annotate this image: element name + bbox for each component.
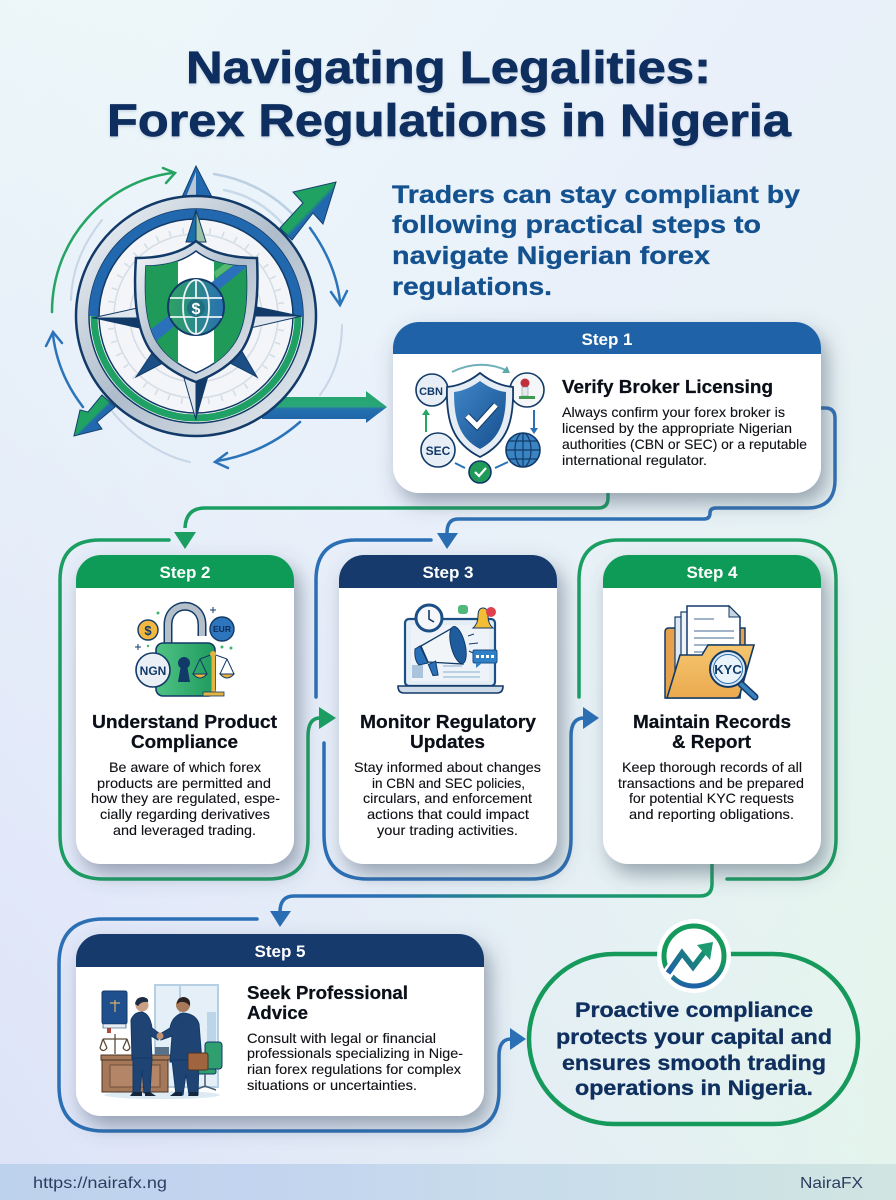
step 2 body: Be aware of which forex bbox=[109, 759, 261, 775]
step 4 title: Maintain Records bbox=[633, 711, 791, 732]
person right bbox=[156, 997, 208, 1096]
step 2 body: and leveraged trading. bbox=[113, 822, 256, 838]
step 1 title: Verify Broker Licensing bbox=[562, 376, 773, 397]
subtitle text block: following practical steps to bbox=[392, 211, 761, 239]
person left bbox=[130, 997, 160, 1096]
green chair bbox=[194, 1042, 222, 1090]
step 3 title: Updates bbox=[410, 731, 485, 752]
step 2 title bbox=[92, 711, 277, 752]
compass points bbox=[186, 210, 196, 242]
footer bbox=[0, 1164, 896, 1200]
outline: step 4 bbox=[579, 540, 836, 879]
icon: verified shield with regulators bbox=[416, 365, 544, 483]
panel: step 1 bbox=[393, 322, 821, 493]
footer brand: NairaFX bbox=[800, 1175, 863, 1192]
outline: step 5 to closing message bbox=[59, 919, 526, 1131]
globe with currency bbox=[168, 279, 224, 335]
icon: verified shield with regulators: CBN bbox=[419, 386, 443, 398]
compass ring bbox=[76, 196, 316, 436]
step 5 header: Step 5 bbox=[254, 942, 306, 961]
orbit arrows bbox=[46, 168, 347, 468]
title bbox=[107, 42, 792, 146]
icon: padlock with currencies and scales bbox=[135, 606, 234, 696]
step 4 body: for potential KYC requests bbox=[629, 790, 794, 806]
panel: step 2 bbox=[76, 555, 294, 864]
step 2 title: Compliance bbox=[131, 731, 238, 752]
connector: step 1 to step 3 bbox=[437, 408, 835, 549]
step 2 header: Step 2 bbox=[159, 563, 211, 582]
arrow SW bbox=[74, 395, 115, 436]
icon: folder with KYC magnifier bbox=[665, 606, 755, 698]
desk bbox=[101, 1047, 173, 1092]
step 1 body bbox=[562, 404, 807, 468]
icon: professionals shaking hands bbox=[100, 985, 222, 1099]
scales bbox=[100, 1034, 130, 1054]
step 5 body: Consult with legal or financial bbox=[247, 1030, 436, 1046]
icon: growth arrow badge bbox=[657, 919, 731, 993]
step 4 title bbox=[633, 711, 791, 752]
step 3 body: your trading activities. bbox=[377, 822, 518, 838]
step 3 body bbox=[354, 759, 541, 838]
step 3 header bbox=[339, 555, 557, 588]
step 3 header: Step 3 bbox=[422, 563, 474, 582]
step 3 body: actions that could impact bbox=[367, 806, 529, 822]
step 3 body: circulars, and enforcement bbox=[363, 790, 532, 806]
step 5 body: situations or uncertainties. bbox=[247, 1077, 417, 1093]
subtitle text block: regulations. bbox=[392, 273, 552, 301]
step 1 body: authorities (CBN or SEC) or a reputable bbox=[562, 436, 807, 452]
footer link: https://nairafx.ng bbox=[33, 1175, 167, 1192]
step 3 body: Stay informed about changes bbox=[354, 759, 541, 775]
step 5 title bbox=[247, 982, 408, 1023]
step 2 title: Understand Product bbox=[92, 711, 277, 732]
icon: verified shield with regulators: SEC bbox=[426, 444, 451, 458]
title: Forex Regulations in Nigeria bbox=[107, 95, 792, 146]
icon: padlock with currencies and scales: EUR bbox=[213, 624, 231, 634]
arrow NE bbox=[280, 182, 336, 240]
outline: step 2 bbox=[60, 540, 336, 879]
step 2 body: cially regarding derivatives bbox=[100, 806, 270, 822]
step 5 title: Seek Professional bbox=[247, 982, 408, 1003]
arrow E bbox=[262, 391, 387, 423]
step 4 body: and reporting obligations. bbox=[629, 806, 794, 822]
briefcase bbox=[188, 1053, 208, 1070]
step 2 body bbox=[91, 759, 280, 838]
step 4 header: Step 4 bbox=[686, 563, 738, 582]
connector: step 4 to step 5 bbox=[270, 864, 712, 927]
step 5 body: rian forex regulations for complex bbox=[247, 1061, 461, 1077]
step 5 header bbox=[76, 934, 484, 967]
icon: compass shield emblem bbox=[46, 166, 387, 468]
icon: padlock with currencies and scales: NGN bbox=[140, 664, 166, 678]
subtitle text block bbox=[392, 181, 800, 301]
closing message text: ensures smooth trading bbox=[562, 1051, 826, 1075]
step 4 header bbox=[603, 555, 821, 588]
step 4 body bbox=[618, 759, 804, 822]
step 4 body: Keep thorough records of all bbox=[622, 759, 802, 775]
panel: step 4 bbox=[603, 555, 821, 864]
shield bbox=[135, 241, 257, 382]
step 1 body: Always confirm your forex broker is bbox=[562, 404, 785, 420]
step 1 header: Step 1 bbox=[581, 330, 633, 349]
step 1 body: international regulator. bbox=[562, 452, 707, 468]
step 4 body: transactions and be prepared bbox=[618, 775, 804, 791]
closing message text: operations in Nigeria. bbox=[575, 1076, 813, 1100]
panel: step 3 bbox=[339, 555, 557, 864]
step 3 title: Monitor Regulatory bbox=[360, 711, 537, 732]
connector: step 1 to step 2 bbox=[174, 493, 608, 549]
step 1 body: licensed by the appropriate Nigerian bbox=[562, 420, 792, 436]
window bbox=[155, 985, 218, 1087]
panel: closing message bbox=[529, 919, 858, 1124]
step 1 header bbox=[393, 322, 821, 354]
step 3 body: in CBN and SEC policies, bbox=[372, 775, 525, 791]
icon: padlock with currencies and scales: $ bbox=[144, 623, 152, 638]
step 5 title: Advice bbox=[247, 1002, 308, 1023]
subtitle text block: navigate Nigerian forex bbox=[392, 242, 710, 270]
closing message text: protects your capital and bbox=[556, 1025, 832, 1049]
closing message text bbox=[556, 998, 832, 1100]
icon: laptop with megaphone and alerts bbox=[398, 605, 503, 693]
icon: compass shield emblem: $ bbox=[192, 301, 201, 318]
icon: folder with KYC magnifier: KYC bbox=[714, 662, 742, 677]
panel: step 5 bbox=[76, 934, 484, 1116]
step 4 title: & Report bbox=[672, 731, 751, 752]
closing message text: Proactive compliance bbox=[575, 998, 813, 1022]
step 5 body bbox=[247, 1030, 463, 1093]
outline: step 3 bbox=[316, 540, 599, 879]
step 5 body: professionals specializing in Nige- bbox=[247, 1045, 463, 1061]
step 2 header bbox=[76, 555, 294, 588]
step 2 body: products are permitted and bbox=[97, 775, 271, 791]
north spike bbox=[182, 166, 212, 197]
law book bbox=[102, 991, 127, 1033]
step 3 title bbox=[360, 711, 537, 752]
step 2 body: how they are regulated, espe- bbox=[91, 790, 280, 806]
title: Navigating Legalities: bbox=[186, 42, 711, 93]
subtitle text block: Traders can stay compliant by bbox=[392, 181, 800, 209]
